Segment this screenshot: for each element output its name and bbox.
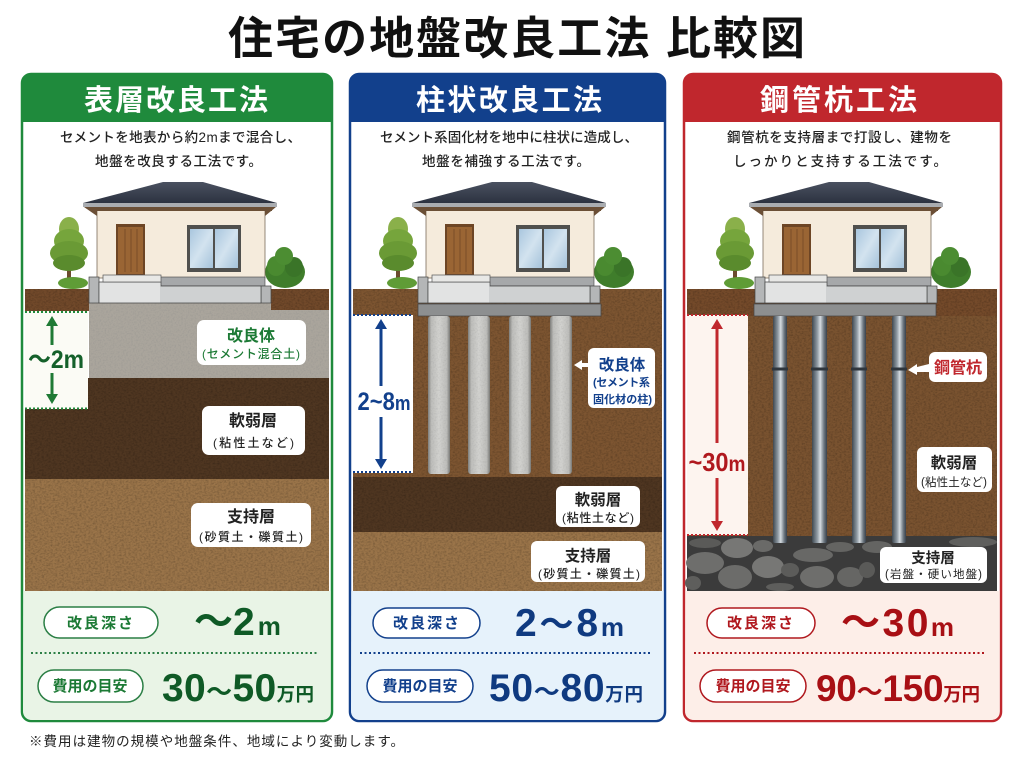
soil cross-section [25,289,329,591]
house with trees [50,182,305,303]
label: soft layer: 軟弱層 [931,454,977,472]
stats: column improvement [351,591,664,720]
arrow: to column [574,360,588,370]
label: bearing layer [531,541,645,582]
footnote: ※費用は建物の規模や地盤条件、地域により変動します。 [29,733,404,749]
label: soft layer: 軟弱層 [575,491,621,509]
title: 住宅の地盤改良工法 比較図 [228,13,805,64]
steel piles [772,316,907,543]
cost value: 50～80万円 [489,667,643,710]
depth pill: 改良深さ [727,614,795,632]
depth indicator: 2~8m [358,388,410,416]
description: 地盤を改良する工法です。 [95,153,262,169]
description: 地盤を補強する工法です。 [422,154,590,169]
label: improved body: 改良体 [227,326,275,345]
cost pill: 費用の目安 [52,677,128,695]
label: bearing layer: (砂質土・礫質土) [199,529,303,544]
label: steel pile [929,352,987,382]
label: improved body: (セメント混合土) [202,346,300,361]
description: セメント系固化材を地中に柱状に造成し、 [380,130,638,145]
stats: steel pipe pile [685,591,1000,720]
label: bearing layer: 支持層 [911,550,955,567]
foundation slab [754,304,936,316]
label: soft layer: 軟弱層 [229,412,277,430]
description: 鋼管杭を支持層まで打設し、建物を [727,129,952,145]
description: セメントを地表から約2mまで混合し、 [60,129,301,145]
soil cross-section [687,289,997,537]
description [60,129,301,169]
label: improved body: (セメント系 [593,376,650,389]
cost value: 90～150万円 [816,668,980,709]
panel: surface improvement [22,74,332,721]
header: steel pipe pile: 鋼管杭工法 [760,84,917,117]
depth indicator [353,315,413,473]
header: steel pipe pile [684,74,1001,122]
header: column improvement [350,74,665,122]
label: soft layer [556,486,640,527]
cost pill [700,670,806,702]
bedrock [685,536,997,591]
depth value: ～30m [841,602,954,645]
description: しっかりと支持する工法です。 [733,154,947,169]
foundation slab [418,304,601,316]
house with trees [379,182,634,303]
description [380,130,638,169]
header: surface improvement [22,74,332,122]
depth indicator: ～2m [28,346,84,374]
depth value: 2～8m [515,602,624,645]
depth pill: 改良深さ [393,614,461,632]
label: bearing layer: 支持層 [227,507,275,526]
depth pill [44,607,158,638]
label: improved body [197,320,306,365]
label: improved body: 固化材の柱) [593,392,652,406]
depth pill [707,608,815,638]
label: bearing layer [191,503,311,547]
depth indicator [25,311,88,409]
cost pill: 費用の目安 [382,677,458,695]
panel: steel pipe pile [684,74,1001,721]
label: bearing layer [880,547,987,583]
label: soft layer [202,406,305,455]
soil cross-section [353,289,662,591]
panel: column improvement [350,74,665,721]
label: bearing layer: 支持層 [565,547,611,565]
cost pill [367,670,473,702]
depth indicator: ~30m [688,447,746,477]
label: improved body: 改良体 [599,355,646,374]
cost pill: 費用の目安 [715,677,791,695]
label: soft layer [917,447,992,492]
depth pill [373,608,480,638]
arrow: to pile [908,364,929,375]
stats: surface improvement [23,591,331,720]
house with trees [716,182,971,303]
label: bearing layer: (岩盤・硬い地盤) [885,567,982,581]
depth pill: 改良深さ [67,614,135,632]
soil-cement columns [428,316,572,474]
cost pill [38,670,143,702]
cost value: 30～50万円 [162,667,314,710]
depth indicator [687,315,748,535]
depth value: ～2m [194,601,281,644]
label: soft layer: (粘性土など) [921,475,987,489]
label: soft layer: (粘性土など) [562,511,634,525]
header: column improvement: 柱状改良工法 [416,84,602,117]
label: bearing layer: (砂質土・礫質土) [538,566,640,581]
label: steel pile: 鋼管杭 [934,358,982,377]
header: surface improvement: 表層改良工法 [84,84,268,117]
label: improved body [588,348,655,408]
description [727,129,952,169]
label: soft layer: (粘性土など) [213,436,294,450]
